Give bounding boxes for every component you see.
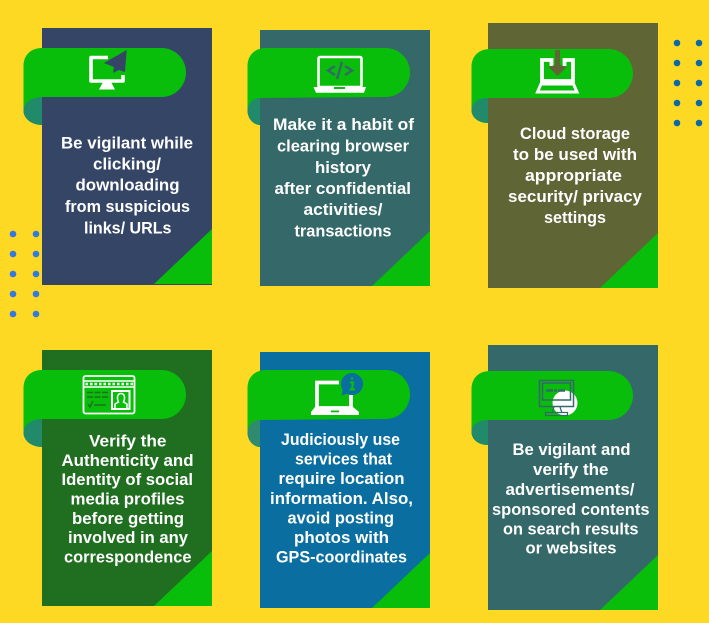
text: browser history tip: transactions [294, 222, 392, 240]
text: verify profiles tip: Authenticity and [62, 452, 194, 470]
text: browser history tip: after confidential [274, 180, 411, 198]
panel: sponsored contents [472, 345, 658, 610]
panel: suspicious links [24, 28, 212, 285]
text: suspicious links tip: clicking/ [93, 156, 161, 174]
text: cloud storage tip: security/ privacy [508, 188, 643, 206]
text: verify profiles tip [62, 432, 194, 566]
text: cloud storage tip [508, 125, 643, 227]
icon: laptop with code [314, 57, 366, 93]
text: sponsored contents tip: Be vigilant and [512, 441, 630, 459]
panel: cloud storage [472, 23, 658, 288]
panel: location services [248, 352, 430, 608]
text: location services tip: information. Also, [270, 490, 413, 508]
text: cloud storage tip: settings [544, 209, 606, 227]
text: browser history tip [273, 116, 415, 240]
text: verify profiles tip: before getting [72, 510, 184, 528]
text: cloud storage tip: to be used with [513, 146, 637, 164]
text: browser history tip: history [315, 159, 372, 177]
text: suspicious links tip: downloading [76, 176, 180, 194]
text: suspicious links tip [61, 134, 193, 238]
text: browser history tip: clearing browser [277, 138, 410, 156]
text: browser history tip: Make it a habit of [273, 116, 415, 134]
icon: monitor with paper plane [91, 50, 127, 90]
text: sponsored contents tip: on search results [503, 520, 638, 538]
text: verify profiles tip: correspondence [64, 548, 192, 566]
text: suspicious links tip: Be vigilant while [61, 134, 193, 152]
text: verify profiles tip: involved in any [68, 529, 189, 547]
text: sponsored contents tip: advertisements/ [506, 481, 635, 499]
icon: laptop with info bubble [311, 373, 363, 415]
text: location services tip: require location [278, 470, 404, 488]
panel: verify profiles [24, 350, 212, 606]
text: location services tip: avoid posting [288, 510, 394, 528]
text: browser history tip: activities/ [304, 201, 383, 219]
text: verify profiles tip: media profiles [70, 490, 184, 508]
text: suspicious links tip: from suspicious [65, 198, 190, 216]
text: verify profiles tip: Verify the [89, 432, 166, 450]
text: sponsored contents tip [492, 441, 650, 558]
icon: identity card [84, 376, 134, 414]
text: location services tip: GPS-coordinates [276, 548, 407, 566]
icon: monitor with advert [540, 380, 578, 416]
text: sponsored contents tip: sponsored contents [492, 501, 650, 519]
text: location services tip: services that [295, 450, 393, 468]
text: location services tip: Judiciously use [281, 431, 400, 449]
panel: browser history [248, 30, 430, 286]
text: verify profiles tip: Identity of social [62, 471, 193, 489]
icon: laptop with download arrow [538, 50, 577, 92]
text: suspicious links tip: links/ URLs [84, 220, 172, 238]
dot pattern: right [674, 40, 702, 126]
text: location services tip: photos with [294, 529, 389, 547]
text: cloud storage tip: appropriate [525, 167, 622, 185]
text: sponsored contents tip: or websites [526, 540, 616, 558]
text: location services tip [270, 431, 413, 566]
text: sponsored contents tip: verify the [533, 461, 608, 479]
dot pattern: left [10, 231, 39, 317]
text: cloud storage tip: Cloud storage [520, 125, 630, 143]
